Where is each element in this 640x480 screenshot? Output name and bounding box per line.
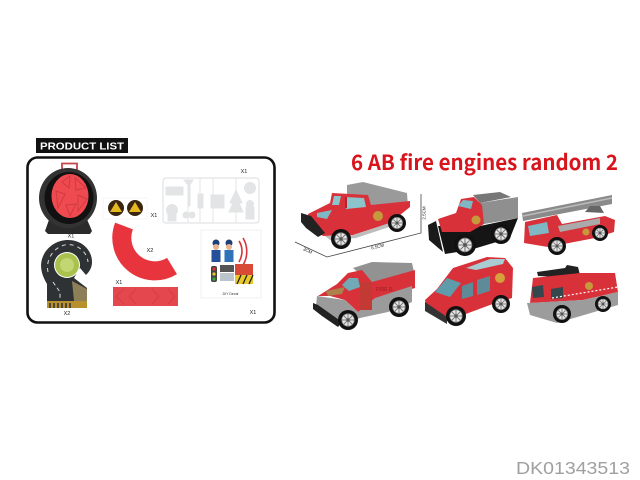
icon: warning stickers — [103, 198, 147, 219]
icon: jeep fire truck — [301, 182, 410, 249]
dimension lines: 2.5CM — [422, 206, 426, 220]
dimension lines — [295, 194, 426, 257]
title: 6 AB fire engines random 2 — [351, 147, 618, 177]
icon: armored rescue truck: FIRE D. — [376, 287, 394, 293]
dimension lines: 3CM — [302, 246, 313, 255]
decal: traffic light — [211, 266, 217, 282]
label: ramp quantity: X1 — [116, 280, 122, 286]
decal caption: DIY Decal — [223, 292, 239, 296]
icon: wheel storage case — [39, 164, 97, 234]
heading: product list: PRODUCT LIST — [40, 140, 125, 152]
panel: product list frame — [28, 158, 274, 322]
decal: gauges — [220, 265, 234, 281]
label: case quantity: X1 — [68, 234, 74, 240]
icon: DIY decal sheet — [201, 230, 261, 298]
dimension lines: 6.5CM — [371, 242, 385, 251]
icon: water cannon fire truck — [527, 265, 618, 323]
icon: tanker fire truck — [428, 192, 518, 256]
label: curve quantity: X2 — [147, 248, 153, 254]
icon: road track piece — [41, 240, 92, 308]
decal: police figures — [212, 240, 234, 262]
icon: armored rescue truck — [313, 262, 415, 330]
label: track quantity: X2 — [64, 311, 70, 317]
icon: plastic accessory sprue — [163, 178, 259, 223]
decal: barrier — [235, 264, 253, 284]
decal: radio signal — [239, 238, 247, 265]
label: stickers quantity: X1 — [151, 213, 157, 219]
label: accessory quantity: X1 — [241, 169, 247, 175]
label: decal quantity: X1 — [250, 310, 256, 316]
icon: red curved track — [122, 226, 172, 271]
icon: red straight ramp — [113, 287, 178, 306]
icon: ladder fire truck — [522, 195, 615, 255]
icon: fire rescue van — [425, 257, 513, 326]
heading: product list — [36, 138, 128, 153]
watermark: product code: DK01343513 — [516, 458, 630, 478]
